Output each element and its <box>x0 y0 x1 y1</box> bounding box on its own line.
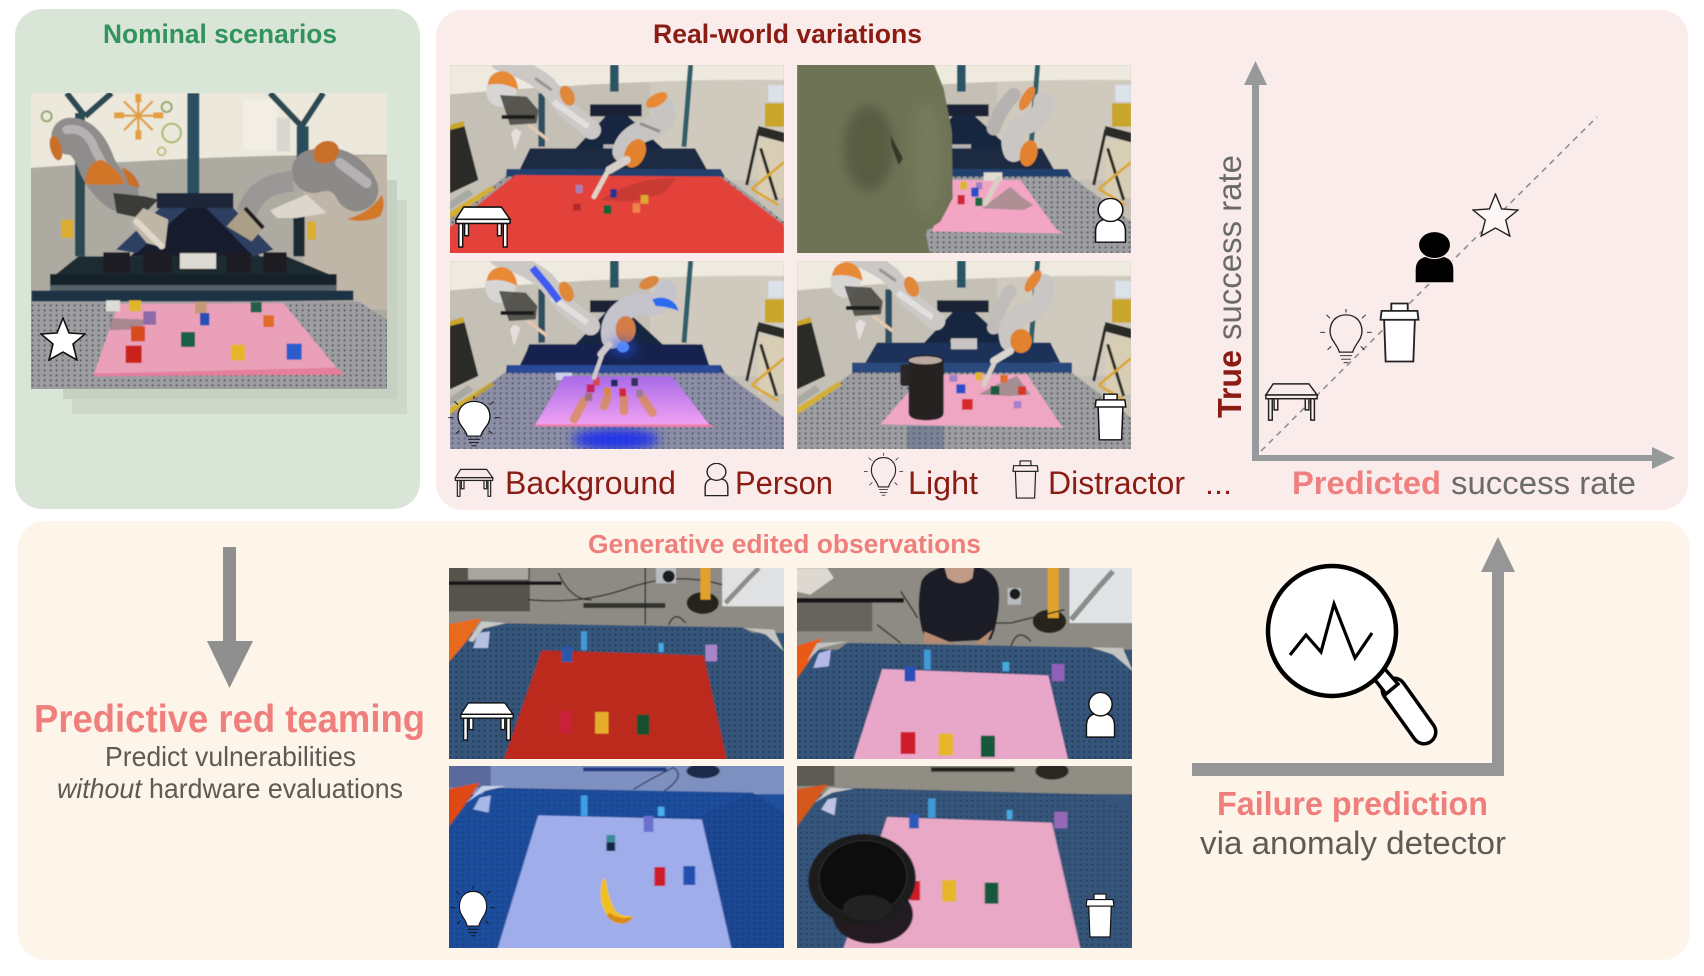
heading: failure prediction: Failure prediction <box>1217 785 1488 822</box>
data point: light bulb <box>1320 309 1372 363</box>
legend icon: light bulb <box>864 453 903 495</box>
photo: generated distractor bucket <box>797 766 1132 948</box>
icon: light bulb on generated blue photo <box>451 886 495 936</box>
photo: blue light variation <box>450 261 784 449</box>
panel: nominal scenarios <box>15 9 420 509</box>
heading: real-world variations: Real-world variations <box>653 19 922 49</box>
icon: person on person photo <box>1096 198 1125 242</box>
description line 2: without hardware evaluations <box>57 773 403 804</box>
icon: person on generated person photo <box>1086 692 1115 737</box>
icon: table on generated red mat <box>461 703 513 740</box>
icon: magnifying glass anomaly detector <box>1268 566 1424 732</box>
data point: star <box>1473 194 1518 236</box>
icon: trash bin on generated bucket photo <box>1086 894 1114 937</box>
elbow arrow up to chart <box>1192 537 1515 776</box>
description: via anomaly detector: via anomaly detector <box>1200 825 1506 861</box>
icon: table on red background photo <box>456 207 510 247</box>
data point: person <box>1415 232 1454 283</box>
x axis label: predicted: Predicted <box>1292 465 1441 501</box>
photo: generated red mat <box>449 568 784 759</box>
photo: generated person <box>797 568 1132 759</box>
photo: nominal bimanual robot scene <box>31 93 387 389</box>
x axis arrow <box>1252 447 1675 469</box>
down arrow <box>207 547 253 688</box>
heading: generative edited observations: Generative edited observations <box>588 531 981 559</box>
legend label: person: Person <box>735 465 833 501</box>
panel: real-world variations <box>436 10 1688 510</box>
legend label: background: Background <box>505 465 676 501</box>
y axis arrow <box>1244 61 1267 461</box>
photo: distractor trash can variation <box>797 261 1131 449</box>
legend icon: person <box>705 463 728 496</box>
photo: person variation <box>797 65 1131 253</box>
legend: variation categories <box>455 453 1232 501</box>
y axis label: true: True <box>1211 350 1248 418</box>
data point: trash bin <box>1381 303 1418 362</box>
chart: true vs predicted success rate <box>1211 61 1675 501</box>
panel: predictive red teaming <box>18 521 1690 960</box>
icon: trash bin on distractor photo <box>1095 394 1126 440</box>
photo: generated blue light with banana <box>449 766 784 948</box>
data point: table <box>1266 384 1317 420</box>
legend ellipsis: ... <box>1205 468 1232 501</box>
legend icon: trash bin <box>1013 461 1038 498</box>
legend label: distractor: Distractor <box>1048 465 1185 501</box>
heading: nominal scenarios: Nominal scenarios <box>103 19 337 49</box>
y axis label: success rate: success rate <box>1211 155 1248 340</box>
photo: red background variation <box>450 65 784 253</box>
heading: predictive red teaming: Predictive red teaming <box>34 698 425 741</box>
description line 1: Predict vulnerabilities <box>105 741 356 772</box>
diagonal reference line <box>1261 117 1597 451</box>
icon: star on nominal photo <box>41 318 85 360</box>
legend icon: table <box>455 469 493 496</box>
legend label: light: Light <box>908 465 978 501</box>
icon: light bulb on blue light photo <box>448 396 500 446</box>
x axis label: success rate: success rate <box>1451 465 1636 501</box>
layered photo shadows <box>63 180 407 414</box>
